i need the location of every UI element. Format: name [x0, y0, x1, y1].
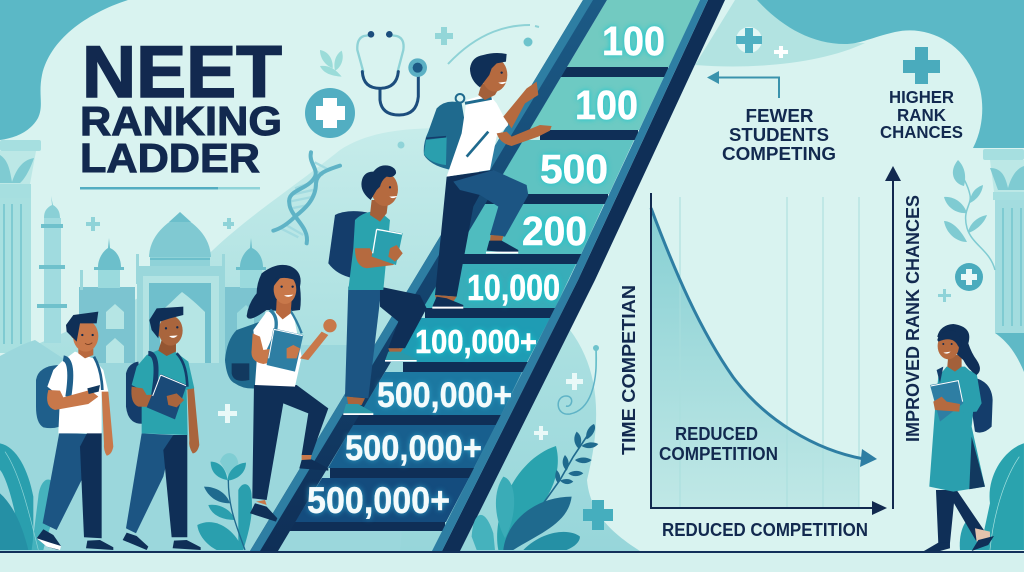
arrow: improved rank chances	[885, 166, 901, 509]
ground hill foreground	[0, 340, 420, 551]
blob: top right band	[695, 0, 865, 66]
rank value: 500,000+ middle: 500,000+	[345, 429, 482, 468]
arrow: fewer students	[707, 71, 779, 98]
chart x axis	[650, 501, 887, 515]
student 4	[328, 165, 427, 415]
ground line	[0, 551, 1024, 553]
chart area fill	[651, 208, 859, 508]
fewer students icon: cross circle	[736, 27, 762, 53]
ground strip	[0, 552, 1024, 572]
plant: flower	[197, 453, 252, 550]
label: fewer students competing: FEWER	[746, 105, 814, 126]
chart curve label: COMPETITION	[659, 444, 778, 464]
label: higher rank chances: CHANCES	[880, 122, 963, 142]
decorative arc	[448, 25, 539, 64]
decorative plus	[435, 27, 453, 45]
squiggle ornament	[558, 348, 596, 414]
taj mahal	[79, 202, 266, 364]
plant: bottom left	[0, 443, 57, 550]
chart curve label: REDUCED	[675, 424, 758, 444]
icon: medical cross circle	[305, 88, 355, 138]
ladder	[250, 0, 725, 551]
title: RANKING	[80, 98, 282, 144]
rank value: 100 second: 100	[575, 82, 638, 128]
title: LADDER	[80, 135, 260, 181]
student 5 climbing	[424, 53, 552, 309]
plant: vine right	[944, 160, 995, 270]
decorative dot	[524, 38, 532, 46]
plant: ladder right	[472, 424, 598, 550]
chart y axis label: TIME COMPETIAN	[619, 285, 639, 455]
plus: white near ladder	[566, 373, 583, 390]
plant: bottom right	[960, 443, 1024, 550]
label: fewer students competing	[722, 105, 836, 164]
decorative plus near taj left	[86, 217, 100, 231]
student 6 standing	[924, 324, 994, 551]
label: fewer students competing: STUDENTS	[729, 124, 829, 145]
icon: stethoscope	[357, 31, 427, 115]
rank value: 100: 100	[602, 18, 665, 64]
plus: white near leaves	[534, 426, 548, 440]
title: NEET	[82, 32, 282, 113]
right rail	[432, 0, 725, 551]
column: left	[0, 140, 41, 353]
plus: small right	[938, 289, 951, 302]
plus: white small left	[218, 404, 237, 423]
chart y axis	[650, 193, 652, 509]
minaret	[37, 196, 67, 343]
left rail	[250, 0, 607, 551]
ladder rungs	[290, 67, 668, 531]
pin dot	[593, 345, 599, 351]
label: higher rank chances: RANK	[897, 105, 946, 125]
student 3	[225, 265, 337, 522]
plus: teal lower	[583, 500, 613, 530]
icon: leaf sprig	[320, 50, 343, 77]
rank value: 500: 500	[540, 146, 608, 192]
scene: hill background	[0, 128, 640, 551]
label: fewer students competing: COMPETING	[722, 143, 836, 164]
title	[80, 32, 282, 181]
student 2	[123, 307, 201, 550]
rank value: 200: 200	[522, 208, 587, 254]
label: improved rank chances: IMPROVED RANK CHANCES	[903, 195, 923, 442]
rank value: 500,000+ bottom: 500,000+	[307, 480, 450, 521]
icon: cross circle right	[955, 263, 983, 291]
label: higher rank chances: HIGHER	[889, 87, 954, 107]
decorative dot small	[398, 142, 404, 148]
blob: top left	[0, 0, 128, 140]
chart: decay curve	[619, 193, 887, 540]
rank value: 100,000+: 100,000+	[415, 323, 537, 360]
title underline	[80, 187, 260, 190]
chart grid lines	[680, 197, 859, 508]
plus: white top right	[774, 46, 788, 58]
chart curve arrowhead	[860, 449, 877, 467]
blob: top right	[757, 0, 1024, 148]
icon: plus higher rank	[903, 47, 940, 84]
icon: dna helix	[273, 152, 340, 243]
rank value: 500,000+ top: 500,000+	[377, 376, 512, 415]
ladder rows	[295, 0, 700, 522]
rank value: 10,000: 10,000	[467, 267, 560, 308]
label: higher rank chances	[880, 87, 963, 142]
chart x axis label: REDUCED COMPETITION	[662, 520, 868, 540]
chart curve label	[659, 424, 778, 464]
pin ornament	[595, 348, 597, 369]
student 1	[36, 312, 113, 550]
decorative plus near taj right	[223, 218, 234, 229]
chart curve	[651, 208, 864, 459]
column: right	[983, 149, 1024, 372]
